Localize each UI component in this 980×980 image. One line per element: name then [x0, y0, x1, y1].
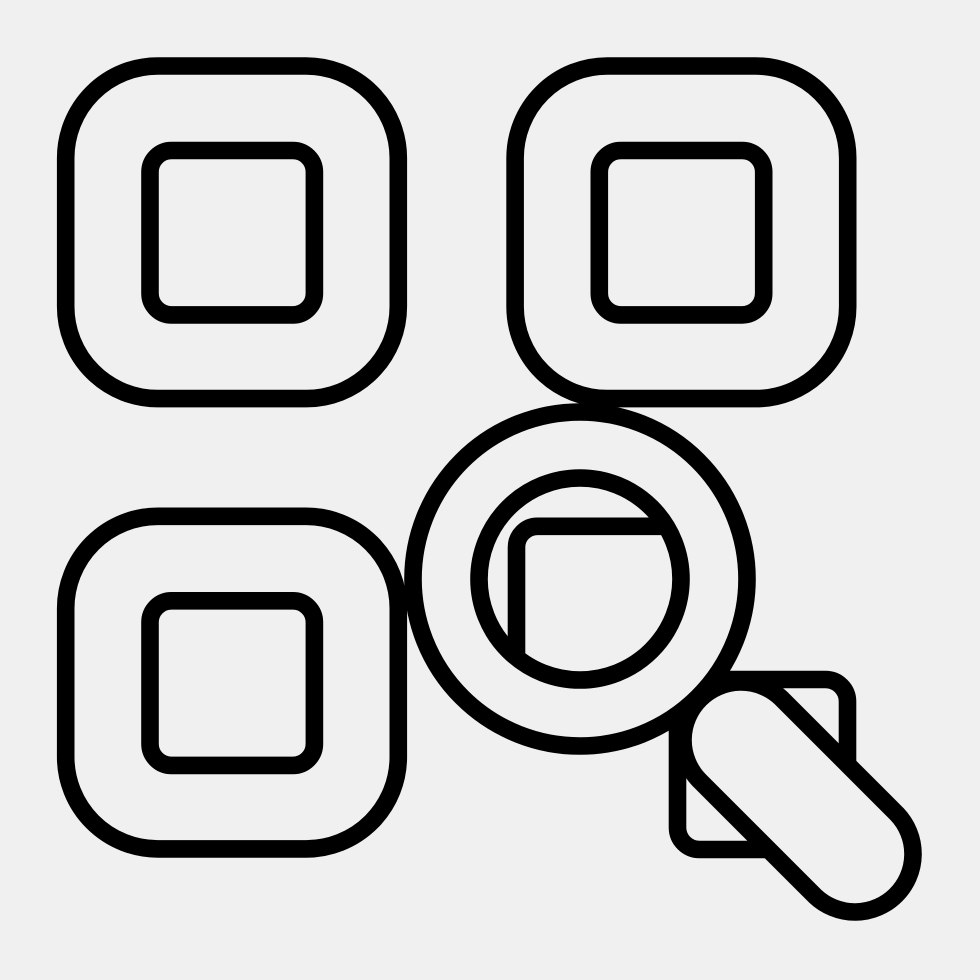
QR finder: top right: [515, 66, 848, 399]
magnifying glass: [413, 412, 913, 912]
QR module: bottom right small square: [678, 680, 848, 850]
QR finder: bottom left: [66, 516, 398, 849]
magnifier lens: [479, 478, 681, 680]
QR finder: top left: [66, 66, 398, 399]
magnified QR square inside lens: [508, 518, 662, 654]
icon: QR code with magnifying glass: [56, 57, 922, 921]
magnifier handle: [683, 682, 913, 912]
magnifier ring: [413, 412, 747, 746]
